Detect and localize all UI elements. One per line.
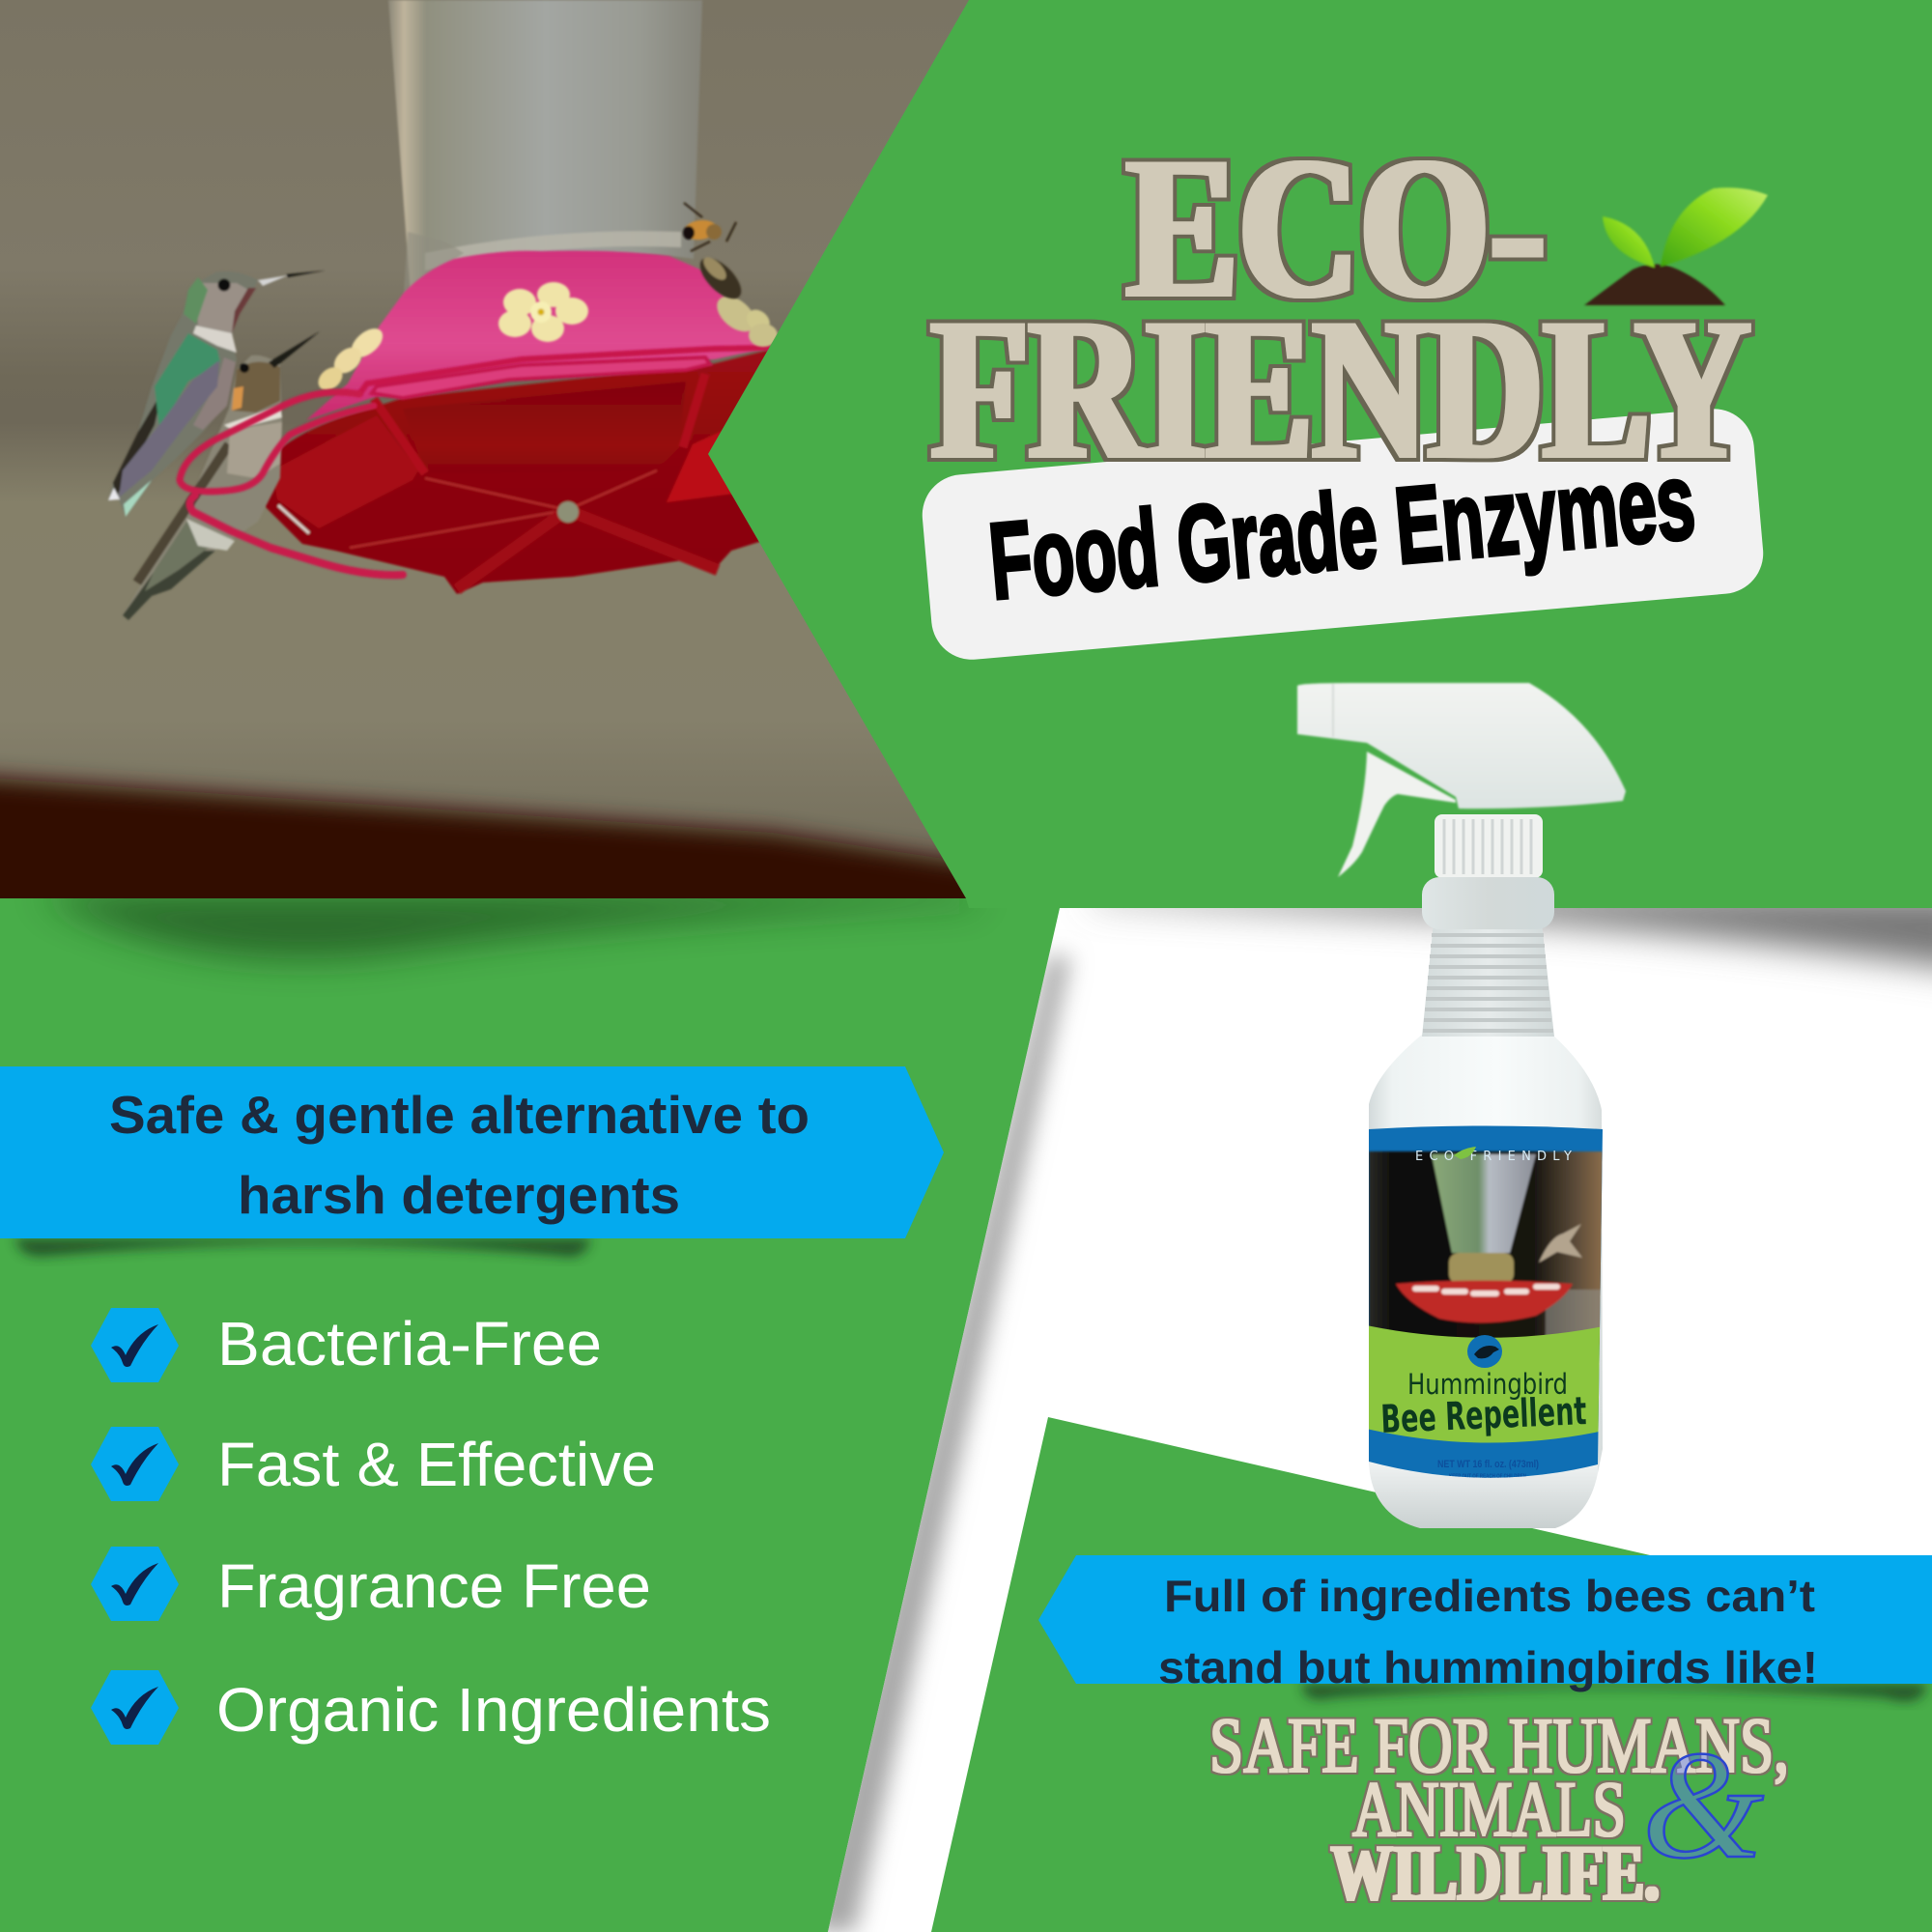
label feeder photo [1369,1151,1604,1345]
line 2: ANIMALS [1352,1765,1626,1853]
feeder glass tube [388,0,702,295]
feeder pink rim [359,348,773,398]
bees on feeder [683,203,748,305]
curled shadow [39,894,976,958]
photo backdrop [0,0,976,898]
product: spray bottle [1297,683,1626,1528]
item text: Bacteria-Free [217,1309,602,1378]
label eco friendly text: ECO FRIENDLY [1415,1150,1572,1164]
right banner shadow [1301,1684,1927,1701]
right banner line 2: stand but hummingbirds like! [1158,1642,1818,1692]
label green band [1362,1324,1608,1443]
right banner line 1: Full of ingredients bees can’t [1164,1571,1815,1621]
panel: right callout [1038,1555,1932,1701]
label warning: KEEP OUT OF REACH OF CHILDREN [1449,1474,1526,1480]
line 3: WILDLIFE. [1331,1829,1660,1917]
script ampersand: & [1642,1719,1764,1890]
panel shadows on white [811,894,1932,1932]
panel: left benefits [0,1066,944,1745]
list item: fragrance free [91,1547,651,1621]
bottle ribbed cap [1435,814,1543,878]
label bird badge [1467,1335,1502,1368]
sticker: food grade enzymes [919,406,1767,663]
lower right green panel [931,1417,1932,1932]
heading line 1: ECO- [1126,116,1546,340]
check badge [91,1547,179,1621]
label product name: Hummingbird [1407,1368,1568,1401]
right banner [1038,1555,1932,1684]
left edge shadow [811,956,1070,1932]
check badge [91,1308,179,1382]
panel: title block [919,116,1768,663]
feeder pink lid [306,251,769,420]
bottle sprayer trigger [1338,752,1456,877]
item text: Organic Ingredients [216,1675,771,1745]
list item: organic ingredients [91,1670,771,1745]
hummingbird: upper [108,270,326,517]
pink wire perch [180,392,403,575]
feeder red tray [256,348,778,594]
list item: bacteria-free [91,1308,602,1382]
white panel [828,908,1932,1932]
item text: Fast & Effective [217,1430,656,1499]
bottle body and shoulder [1369,1035,1603,1473]
text block: safe for humans, animals and wildlife [1209,1701,1789,1917]
label leaf mark [1454,1147,1476,1159]
dark maroon ledge [0,762,966,898]
bottle ribbed neck [1422,923,1554,1037]
check badge [91,1427,179,1501]
label product title: Bee Repellent [1379,1389,1587,1442]
sticker background [919,406,1767,663]
icon: sprout in soil [1584,187,1768,305]
bottle label [1362,1121,1608,1497]
hummingbird: lower [123,331,320,620]
check badge [91,1670,179,1745]
list item: fast and effective [91,1427,656,1501]
left banner [0,1066,944,1238]
tray hub [557,501,579,523]
item text: Fragrance Free [217,1551,651,1621]
left banner line 1: Safe & gentle alternative to [109,1085,810,1145]
label blue band [1362,1121,1608,1497]
label net weight: NET WT 16 fl. oz. (473ml) [1437,1459,1539,1470]
bottle collar [1422,877,1554,929]
bottle sprayer head [1297,683,1626,809]
tray side panel [272,415,418,528]
tray right glow [667,431,732,503]
banner shadow [14,1238,591,1257]
yellow flower port [498,282,588,342]
top edge shadow [1092,894,1932,971]
bottle base [1370,1462,1598,1528]
side flower ports [317,296,779,390]
tray centre window [403,382,686,473]
left banner line 2: harsh detergents [238,1165,680,1225]
panel: hummingbird feeder photo [0,0,995,947]
photo bottom drop shadow on green [39,894,976,958]
